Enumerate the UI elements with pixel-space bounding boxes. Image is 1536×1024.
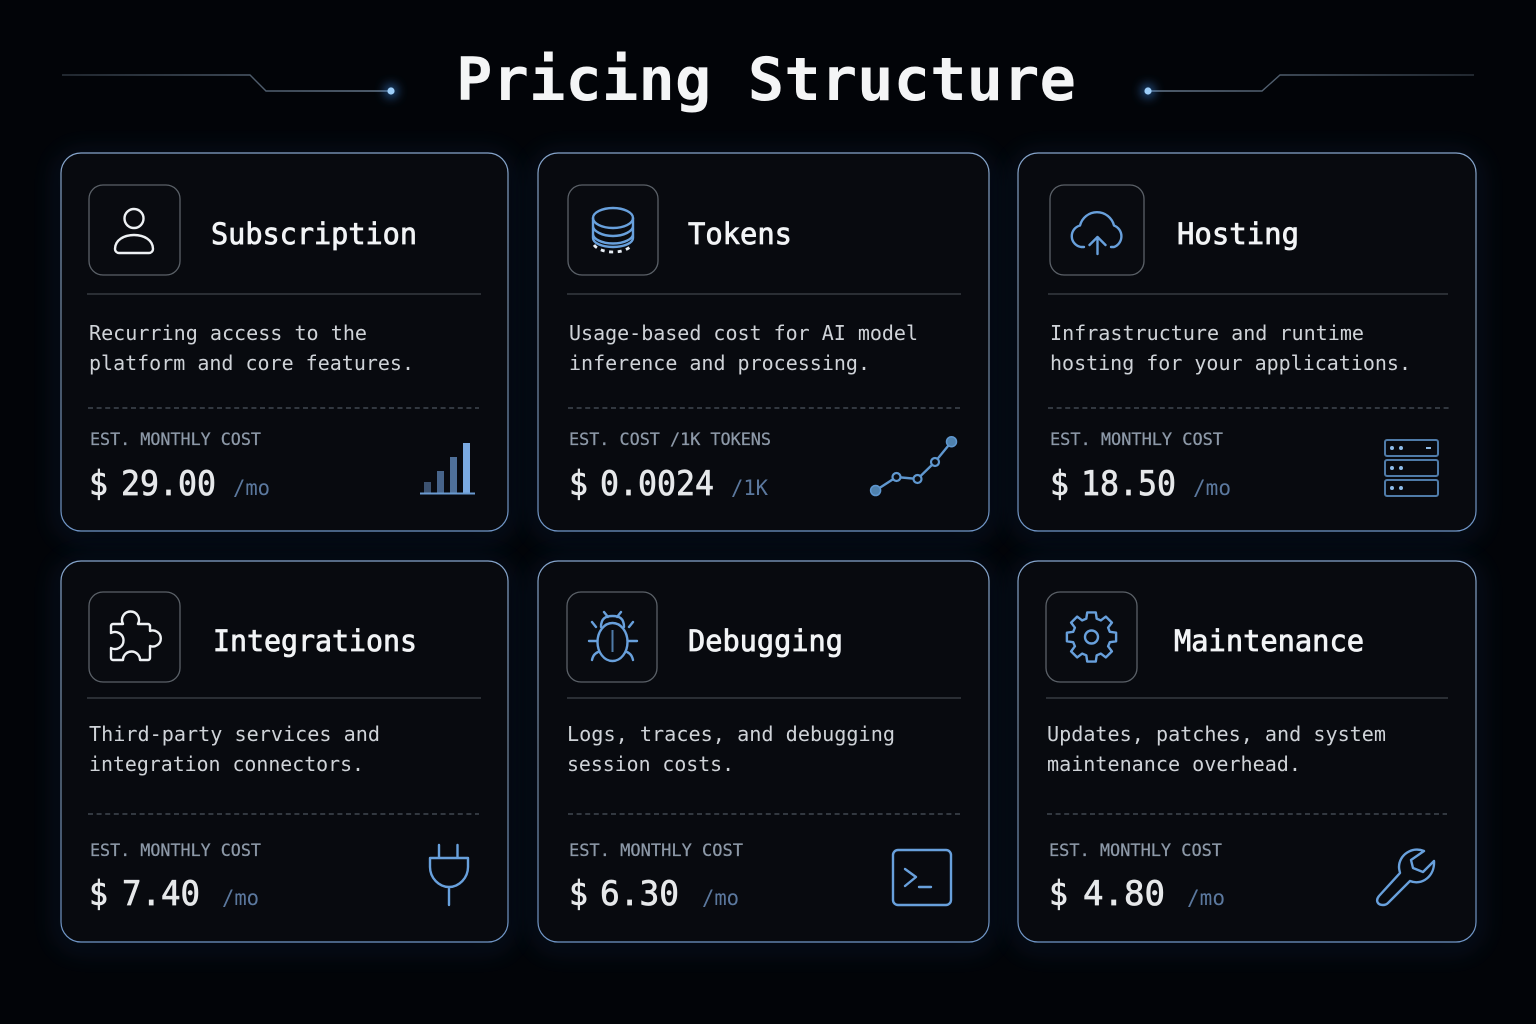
price (89, 874, 259, 914)
description: Third-party services and (89, 722, 380, 746)
cost label: EST. MONTHLY COST (1049, 841, 1222, 860)
icon: cloud upload (1050, 185, 1144, 275)
description: inference and processing. (569, 351, 870, 375)
icon: server rack (1385, 440, 1438, 496)
price: 7.40 (122, 874, 200, 914)
price (569, 464, 768, 504)
panel: hosting (1018, 153, 1476, 531)
description (89, 722, 380, 776)
price: /mo (1193, 476, 1231, 500)
description: integration connectors. (89, 752, 364, 776)
header ornament: right circuit line (1141, 75, 1474, 98)
heading: Subscription (211, 217, 417, 251)
price: 0.0024 (600, 464, 714, 504)
cost label: EST. MONTHLY COST (1050, 430, 1223, 449)
icon: terminal (893, 850, 951, 905)
icon: puzzle piece (89, 592, 180, 682)
price: $ (1049, 874, 1068, 914)
price: 4.80 (1083, 874, 1165, 914)
icon: line chart (871, 437, 956, 496)
icon: bug (567, 592, 657, 682)
panel: debugging (538, 561, 989, 942)
price: $ (569, 874, 588, 914)
description (1050, 321, 1411, 375)
price (569, 874, 739, 914)
cost label: EST. MONTHLY COST (569, 841, 743, 860)
icon: bar chart (420, 443, 475, 494)
description: Logs, traces, and debugging (567, 722, 895, 746)
description (1047, 722, 1386, 776)
description: hosting for your applications. (1050, 351, 1411, 375)
price: /1K (731, 476, 768, 500)
heading: Maintenance (1174, 624, 1364, 658)
description: Recurring access to the (89, 321, 367, 345)
description (567, 722, 895, 776)
price (1049, 874, 1225, 914)
price: 29.00 (121, 464, 216, 504)
title: Pricing Structure (456, 45, 1076, 115)
price: /mo (233, 476, 270, 500)
description: Updates, patches, and system (1047, 722, 1386, 746)
description: session costs. (567, 752, 734, 776)
price: $ (1050, 464, 1069, 504)
price: /mo (222, 886, 259, 910)
price: 18.50 (1081, 464, 1176, 504)
panel: integrations (61, 561, 508, 942)
heading: Debugging (688, 624, 843, 658)
header ornament: left circuit line (62, 75, 398, 98)
price: /mo (1187, 886, 1225, 910)
price: 6.30 (600, 874, 679, 914)
description: platform and core features. (89, 351, 414, 375)
price: $ (569, 464, 588, 504)
price (89, 464, 270, 504)
icon: user (89, 185, 180, 275)
panel: subscription (61, 153, 508, 531)
heading: Tokens (688, 217, 792, 251)
price: $ (89, 874, 108, 914)
heading: Integrations (213, 624, 417, 658)
cost label: EST. MONTHLY COST (90, 430, 261, 449)
cost label: EST. COST /1K TOKENS (569, 430, 771, 449)
price: $ (89, 464, 108, 504)
heading: Hosting (1177, 217, 1299, 251)
icon: token stack (568, 185, 658, 275)
price: /mo (702, 886, 739, 910)
icon: gear (1046, 592, 1137, 682)
panel: tokens (538, 153, 989, 531)
panel: maintenance (1018, 561, 1476, 942)
description: Infrastructure and runtime (1050, 321, 1364, 345)
price (1050, 464, 1231, 504)
icon: wrench (1377, 850, 1434, 905)
description (569, 321, 918, 375)
cost label: EST. MONTHLY COST (90, 841, 261, 860)
description (89, 321, 414, 375)
description: Usage-based cost for AI model (569, 321, 918, 345)
description: maintenance overhead. (1047, 752, 1301, 776)
icon: plug (430, 845, 468, 905)
